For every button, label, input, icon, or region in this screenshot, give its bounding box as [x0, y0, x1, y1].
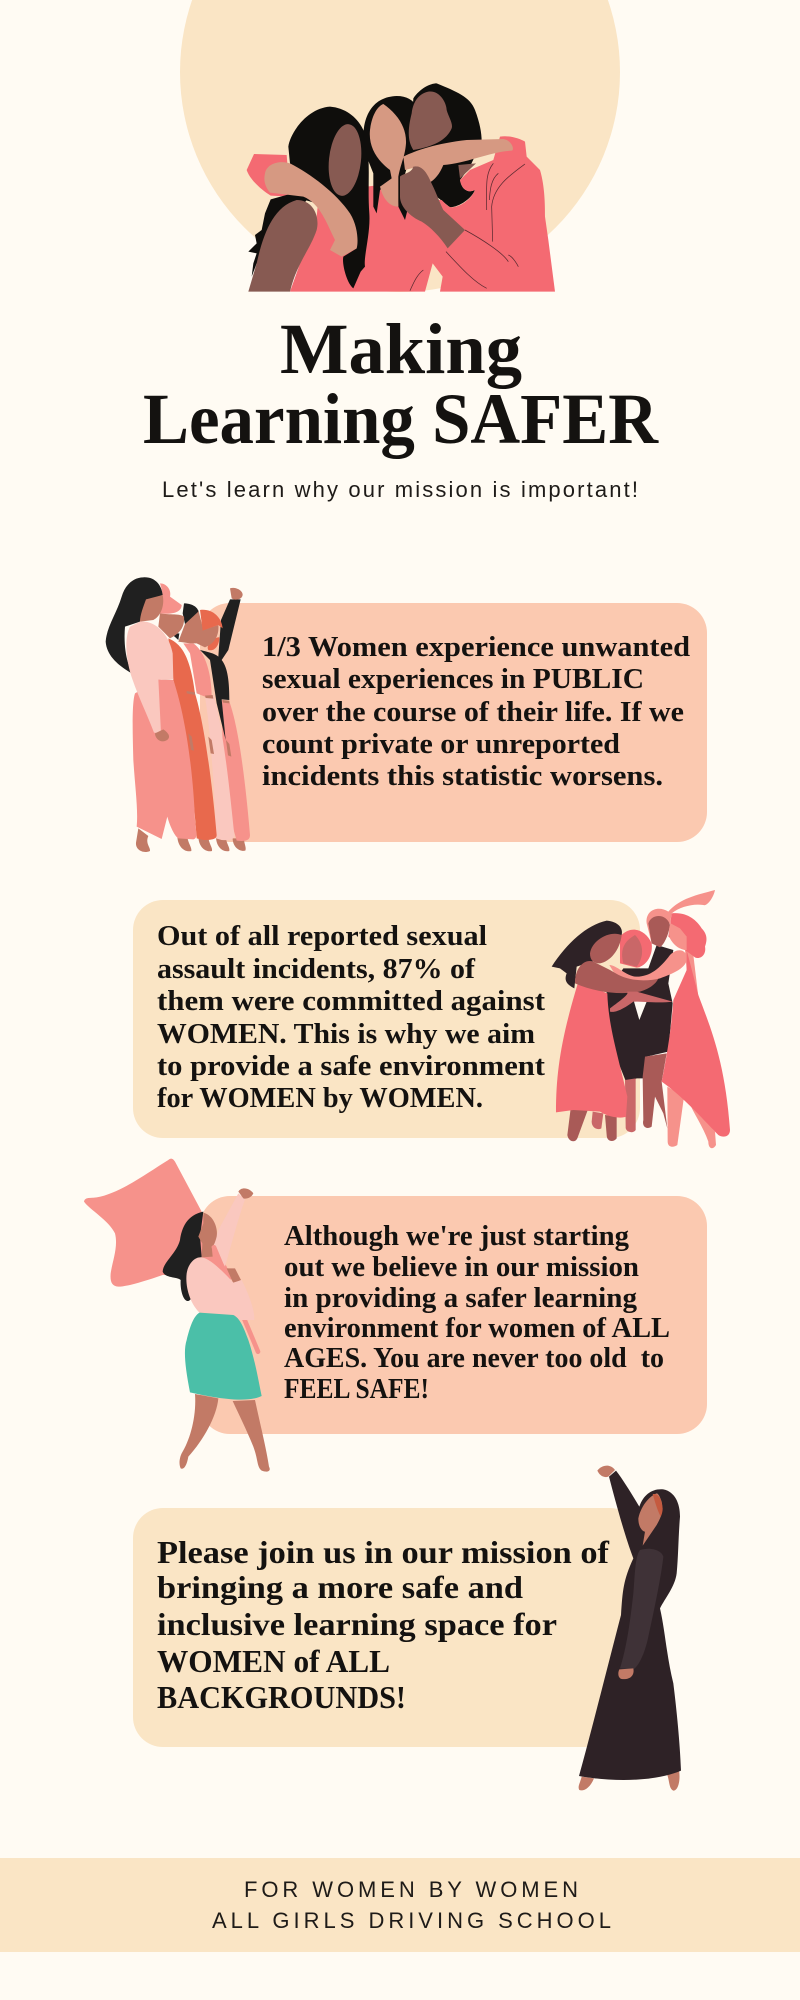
footer text: FOR WOMEN BY WOMEN: [244, 1877, 578, 1902]
text: 87 percent of incidents: assault incidents, 87% of: [157, 953, 475, 985]
text: one in three women: 1/3 Women experience unwanted: [262, 631, 690, 663]
text: one in three women: count private or unreported: [262, 728, 620, 760]
title: Learning SAFER: [143, 379, 659, 459]
footer text: ALL GIRLS DRIVING SCHOOL: [212, 1908, 611, 1933]
footer band: [0, 1858, 800, 1952]
illustration: woman in robe with raised fist: [579, 1466, 681, 1791]
panel: call to action: [133, 1508, 640, 1747]
text: join our mission: bringing a more safe and: [157, 1569, 523, 1605]
text: join our mission: inclusive learning space for: [157, 1606, 557, 1642]
text: 87 percent of incidents: to provide a safe environment: [157, 1050, 545, 1082]
text: 87 percent of incidents: them were committed against: [157, 985, 545, 1017]
illustration: women hugging: [552, 890, 730, 1148]
illustration: four women in a line: [106, 577, 250, 852]
text: one in three women: sexual experiences in PUBLIC: [262, 663, 644, 695]
text: one in three women: over the course of their life. If we: [262, 696, 684, 728]
text: women of all ages: AGES. You are never too old to: [284, 1342, 664, 1374]
text: join our mission: Please join us in our mission of: [157, 1534, 609, 1570]
panel: statistic one: [200, 603, 707, 842]
text: join our mission: WOMEN of ALL: [157, 1643, 390, 1679]
illustration: woman with flag: [84, 1159, 270, 1472]
text: one in three women: incidents this statistic worsens.: [262, 760, 663, 792]
text: 87 percent of incidents: Out of all reported sexual: [157, 920, 487, 952]
text: women of all ages: in providing a safer learning: [284, 1282, 637, 1314]
footer text: [212, 1877, 611, 1933]
text: women of all ages: [284, 1220, 670, 1405]
title: Making: [280, 309, 522, 389]
panel: statistic three: [200, 1196, 707, 1434]
panel: statistic two: [133, 900, 640, 1138]
illustration: three women embracing: [247, 83, 555, 292]
title: [143, 309, 659, 459]
text: join our mission: BACKGROUNDS!: [157, 1679, 406, 1715]
text: women of all ages: out we believe in our mission: [284, 1251, 639, 1283]
text: 87 percent of incidents: WOMEN. This is why we aim: [157, 1018, 535, 1050]
text: 87 percent of incidents: [157, 920, 545, 1114]
text: women of all ages: Although we're just starting: [284, 1220, 629, 1252]
text: 87 percent of incidents: for WOMEN by WOMEN.: [157, 1082, 483, 1114]
text: women of all ages: environment for women of ALL: [284, 1312, 670, 1344]
subtitle: Let's learn why our mission is important!: [162, 477, 638, 502]
text: join our mission: [157, 1534, 609, 1715]
text: women of all ages: FEEL SAFE!: [284, 1373, 429, 1405]
text: one in three women: [262, 631, 690, 792]
background circle: [180, 0, 620, 292]
